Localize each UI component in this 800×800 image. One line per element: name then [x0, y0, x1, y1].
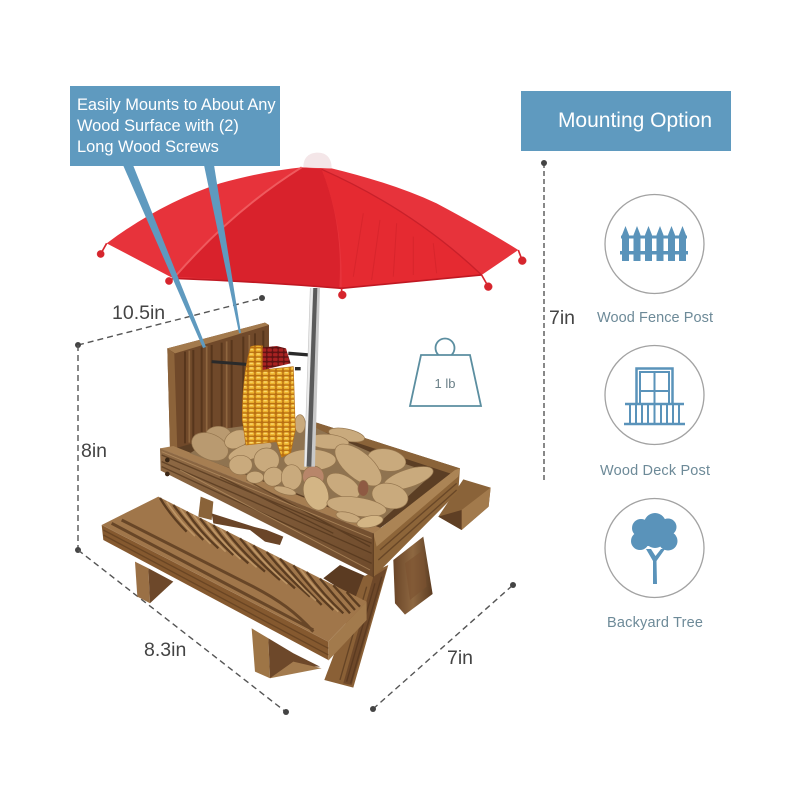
dimension line: 8in height — [75, 345, 81, 553]
bench legs — [135, 562, 322, 678]
umbrella top cap — [303, 153, 332, 168]
option: backyard tree: Backyard Tree — [607, 615, 703, 631]
option: wood deck post — [600, 346, 710, 479]
icon: fence — [620, 226, 688, 261]
label: 8in: 8in — [81, 440, 107, 462]
corn cob — [242, 345, 295, 457]
front table leg — [324, 565, 388, 688]
picnic table feeder photo illustration — [102, 288, 491, 688]
callout box — [70, 86, 280, 166]
red umbrella — [97, 153, 526, 299]
rear table legs — [198, 497, 433, 615]
option: wood fence post: Wood Fence Post — [597, 310, 713, 326]
icon: 1 lb weight — [410, 338, 481, 406]
back board — [167, 323, 269, 452]
icon: tree — [631, 513, 678, 584]
dimension line: 8.3in length — [78, 550, 289, 715]
label: 10.5in: 10.5in — [112, 302, 165, 324]
callout text: Easily Mounts to About Any — [77, 96, 276, 114]
dimension line: 7in umbrella height — [541, 160, 547, 482]
dimension line: 10.5in width — [75, 295, 265, 348]
option: wood fence post — [597, 194, 713, 326]
callout: mounting note — [70, 86, 280, 348]
option: backyard tree — [605, 498, 704, 631]
umbrella pole — [304, 288, 320, 467]
callout leader lines — [123, 165, 241, 348]
screw bracket — [212, 362, 247, 364]
umbrella canopy — [107, 167, 518, 288]
feed tray — [160, 422, 460, 577]
callout text: Long Wood Screws — [77, 138, 219, 156]
label: 7in depth: 7in — [447, 647, 473, 669]
label: 7in height: 7in — [549, 307, 575, 329]
label: 8.3in: 8.3in — [144, 639, 186, 661]
dimension line: 7in depth — [370, 582, 516, 712]
heading: Mounting Option — [521, 91, 731, 151]
heading: Mounting Option: Mounting Option — [558, 109, 712, 132]
pole bracket — [288, 353, 310, 369]
umbrella tassels — [97, 243, 526, 299]
option: wood deck post: Wood Deck Post — [600, 463, 710, 479]
front bench — [102, 497, 367, 678]
icon: 1 lb weight: 1 lb — [435, 376, 455, 391]
rear bench — [438, 479, 491, 530]
callout text: Wood Surface with (2) — [77, 117, 239, 135]
icon: balcony — [624, 368, 685, 424]
peanuts — [187, 415, 436, 530]
